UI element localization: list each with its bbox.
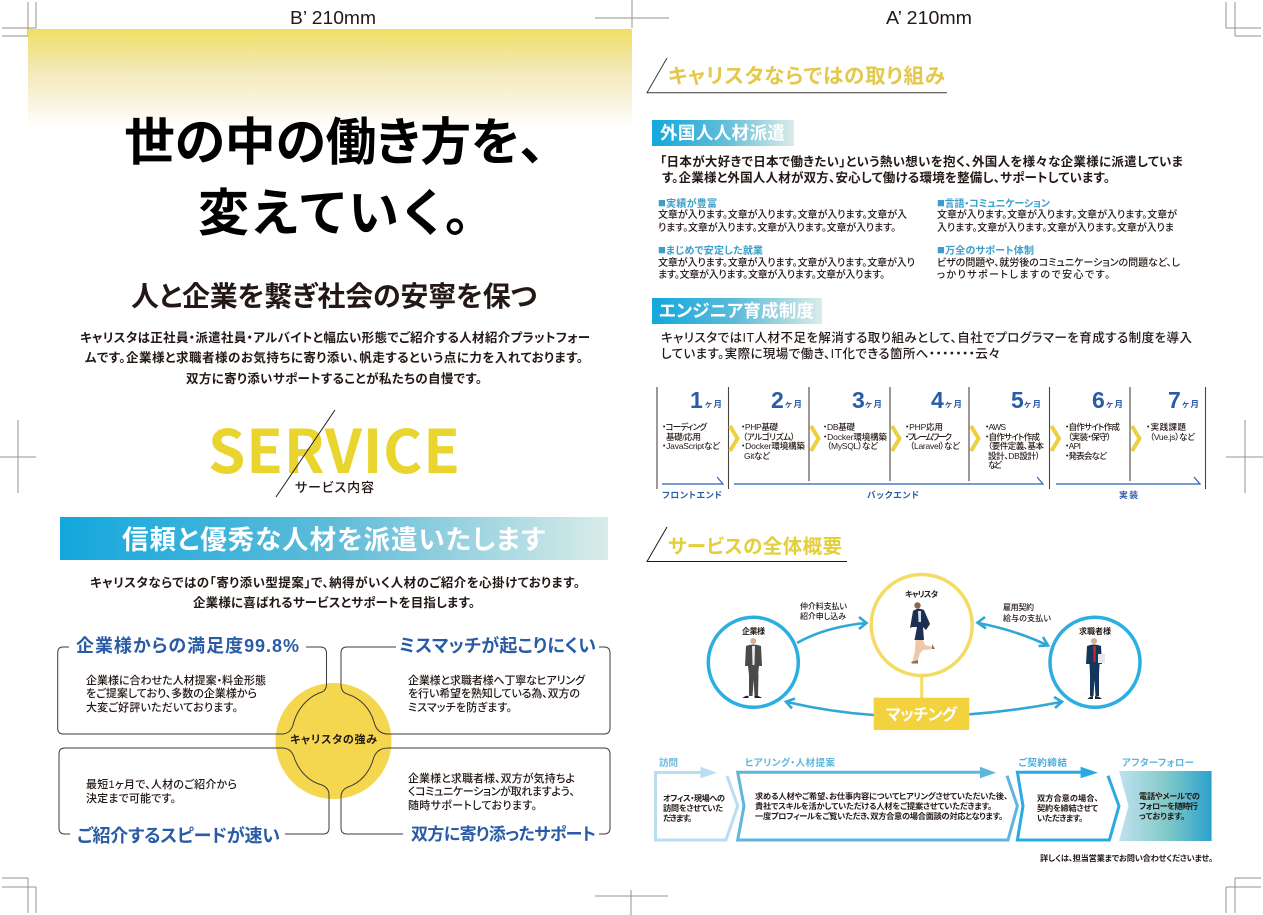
- intro paragraph: ムです。企業様と求職者様のお気持ちに寄り添い、帆走するという点に力を入れております。: [84, 350, 583, 365]
- month numbers: ヶ月: [704, 399, 722, 409]
- section heading: overview: サービスの全体概要: [668, 536, 842, 558]
- top yellow gradient band: [28, 29, 632, 127]
- section heading: overview: [647, 527, 847, 562]
- section heading: initiatives: キャリスタならではの取り組み: [668, 65, 945, 88]
- month 4 content: （Laravel）など: [910, 441, 961, 451]
- strength: satisfaction: 大変ご好評いただいております。: [86, 700, 238, 714]
- month 7 content: [1146, 422, 1196, 442]
- month 6 content: ・自作サイト作成: [1065, 422, 1120, 432]
- month 5 content: 設計、DB設計）: [988, 451, 1040, 461]
- foreign staff paragraph: 「日本が大好きで日本で働きたい」という熱い想いを抱く、外国人を様々な企業様に派遣していま: [660, 154, 1183, 169]
- month 2 content: （アルゴリズム）: [743, 432, 795, 442]
- figure: company man: [742, 638, 762, 698]
- step: aftercare: っております。: [1139, 812, 1185, 821]
- month numbers: 7: [1168, 387, 1181, 413]
- month 4 content: ・PHP応用: [905, 422, 943, 432]
- banner: trust: 信頼と優秀な人材を派遣いたします: [122, 525, 545, 555]
- strength: speed: 最短1ヶ月で、人材のご紹介から: [86, 777, 237, 791]
- strength: support: [341, 748, 610, 844]
- label: engineer training: エンジニア育成制度: [659, 301, 814, 321]
- month 6 content: ・API: [1065, 441, 1081, 451]
- month numbers: ヶ月: [1023, 399, 1041, 409]
- step: visit: 訪問をさせていた: [663, 803, 723, 813]
- month 6 content: ・発表会など: [1065, 451, 1108, 461]
- engineer paragraph: キャリスタではIT人材不足を解消する取り組みとして、自社でプログラマーを育成する制度を導入: [661, 330, 1192, 345]
- matching box: [874, 698, 969, 730]
- engineer paragraph: しています。実際に現場で働き、IT化できる箇所へ・・・・・・・云々: [661, 346, 1000, 361]
- month numbers: 4: [931, 387, 944, 413]
- node labels: キャリスタ: [905, 589, 938, 599]
- step: visit: 訪問: [659, 757, 678, 769]
- size label left: B’ 210mm: [290, 8, 376, 28]
- intro paragraph: キャリスタは正社員・派遣社員・アルバイトと幅広い形態でご紹介する人材紹介プラットフォー: [80, 330, 590, 345]
- arrow labels: [800, 601, 1051, 623]
- feature: support: っかりサポートしますので安心です。: [937, 268, 1110, 281]
- banner paragraph: [90, 575, 580, 610]
- strength: mismatch: ミスマッチが起こりにくい: [399, 635, 596, 656]
- step: contract: 双方合意の場合、: [1037, 793, 1098, 803]
- month 3 content: [823, 422, 887, 451]
- engineer paragraph: [661, 330, 1192, 361]
- step: hearing: [738, 757, 1017, 840]
- month numbers: ヶ月: [784, 399, 802, 409]
- center label: キャリスタの強み: [290, 732, 377, 746]
- strengths diagram: [58, 635, 610, 846]
- month numbers: 1: [690, 387, 703, 413]
- month 3 content: （MySQL）など: [827, 441, 879, 451]
- step: aftercare: [1119, 757, 1212, 841]
- strength: support: 随時サポートしております。: [408, 798, 537, 812]
- arrow labels: 仲介料支払い: [800, 601, 847, 611]
- step: visit: だきます。: [663, 813, 692, 823]
- process flow: [656, 757, 1212, 841]
- phase labels: 実装: [1119, 489, 1138, 500]
- month 5 content: など: [988, 460, 1003, 470]
- strength: mismatch: を行い希望を熟知している為、双方の: [408, 686, 580, 700]
- node labels: 企業様: [742, 626, 765, 636]
- month 7 content: ・実践課題: [1146, 422, 1186, 432]
- chevrons: [730, 426, 1140, 451]
- strength: speed: 決定まで可能です。: [86, 791, 176, 805]
- strength: mismatch: 企業様と求職者様へ丁寧なヒアリング: [408, 673, 586, 687]
- feature: results: [658, 195, 907, 234]
- feature: language: ■言語・コミュニケーション: [937, 195, 1050, 210]
- month numbers: ヶ月: [864, 399, 882, 409]
- banner paragraph: 企業様に喜ばれるサービスとサポートを目指します。: [193, 595, 475, 610]
- strength: support: 双方に寄り添ったサポート: [411, 824, 596, 844]
- feature: language: 文章が入ります。文章が入ります。文章が入ります。文章が: [937, 208, 1177, 221]
- month dividers: [657, 387, 1206, 489]
- step: aftercare: フォローを随時行: [1139, 801, 1198, 811]
- node labels: 求職者様: [1079, 626, 1111, 636]
- step: contract: [1017, 757, 1119, 840]
- step: hearing: 求める人材やご希望、お仕事内容についてヒアリングさせていただいた後、: [755, 791, 1008, 801]
- size label right: A’ 210mm: [886, 8, 972, 28]
- feature: results: 文章が入ります。文章が入ります。文章が入ります。文章が入: [658, 208, 907, 221]
- month 3 content: ・DB基礎: [823, 422, 855, 432]
- section heading: initiatives: [647, 58, 947, 93]
- month 1 content: [662, 422, 721, 451]
- strength: support: 企業様と求職者様、双方が気持ちよ: [408, 771, 575, 785]
- strength: speed: [59, 748, 329, 846]
- step: hearing: 貴社でスキルを活かしていただける人材をご提案させていただきます。: [755, 801, 992, 811]
- arrow labels: 雇用契約: [1003, 602, 1034, 612]
- month 3 content: ・Docker環境構築: [823, 432, 887, 442]
- month 2 content: ・PHP基礎: [741, 422, 778, 432]
- month 6 content: （実装・保守）: [1068, 432, 1111, 442]
- circle: jobseeker: [1050, 617, 1140, 707]
- step: contract: ご契約締結: [1018, 757, 1067, 769]
- strength: satisfaction: 企業様からの満足度99.8%: [76, 636, 299, 656]
- month 2 content: Gitなど: [744, 451, 771, 461]
- step: aftercare: 電話やメールでの: [1139, 791, 1200, 801]
- strength: satisfaction: 企業様に合わせた人材提案・料金形態: [86, 673, 266, 687]
- month 2 content: ・Docker環境構築: [741, 441, 805, 451]
- month 1 content: ・JavaScriptなど: [662, 441, 721, 451]
- strength: mismatch: ミスマッチを防ぎます。: [408, 700, 512, 714]
- strength: satisfaction: [58, 636, 326, 734]
- month 6 content: [1065, 422, 1120, 461]
- figure: jobseeker man: [1086, 638, 1105, 699]
- intro paragraph: [80, 330, 590, 386]
- feature: support: ■万全のサポート体制: [937, 242, 1034, 257]
- relationship diagram: [708, 574, 1140, 730]
- month 5 content: ・AWS: [985, 422, 1006, 432]
- month 5 content: （要件定義、基本: [988, 441, 1044, 451]
- step: visit: [656, 757, 738, 840]
- main title: 世の中の働き方を、: [124, 114, 545, 171]
- step: aftercare: アフターフォロー: [1122, 757, 1194, 769]
- month 1 content: ・コーディング: [662, 422, 708, 432]
- step: contract: いただきます。: [1037, 813, 1083, 823]
- feature: serious: ます。文章が入ります。文章が入ります。文章が入ります。: [658, 268, 885, 281]
- feature: results: ■実績が豊富: [658, 195, 717, 210]
- phase arrows: [662, 477, 1200, 484]
- month numbers: ヶ月: [944, 399, 962, 409]
- feature: language: [937, 195, 1177, 234]
- month 4 content: ・フレームワーク: [905, 432, 952, 442]
- month numbers: 3: [852, 387, 865, 413]
- matching box: マッチング: [886, 705, 958, 724]
- foreign staff paragraph: [660, 154, 1183, 185]
- connector line: [920, 677, 923, 698]
- month 2 content: [741, 422, 805, 461]
- banner paragraph: キャリスタならではの「寄り添い型提案」で、納得がいく人材のご紹介を心掛けております。: [90, 575, 580, 590]
- subtitle: 人と企業を繋ぎ社会の安寧を保つ: [131, 281, 537, 312]
- arrow labels: 給与の支払い: [1003, 613, 1051, 623]
- month 5 content: ・自作サイト作成: [985, 432, 1040, 442]
- flow arrows: [786, 617, 1062, 715]
- feature: serious: [658, 242, 915, 281]
- circle: company: [708, 617, 798, 707]
- strength: satisfaction: をご提案しており、多数の企業様から: [86, 686, 257, 700]
- node labels: [742, 589, 1111, 636]
- service heading: SERVICE: [208, 404, 460, 491]
- step: hearing: ヒアリング・人材提案: [745, 757, 835, 769]
- training timeline: [657, 387, 1206, 500]
- footer note: 詳しくは、担当営業までお問い合わせくださいませ。: [1040, 853, 1213, 863]
- strength: mismatch: [341, 635, 610, 734]
- step: hearing: 一度プロフィールをご覧いただき、双方合意の場合面談の対応となります。: [755, 811, 1003, 821]
- main title: 変えていく。: [198, 185, 470, 242]
- phase labels: [662, 489, 1138, 500]
- feature: results: ります。文章が入ります。文章が入ります。文章が入ります。: [658, 221, 896, 234]
- feature: support: ビザの問題や、就労後のコミュニケーションの問題など、し: [937, 256, 1181, 269]
- month 1 content: 基礎/応用: [666, 432, 701, 442]
- feature: language: 入ります。文章が入ります。文章が入ります。文章が入りま: [937, 221, 1174, 234]
- month numbers: [690, 387, 1199, 413]
- step: contract: 契約を締結させて: [1037, 803, 1098, 813]
- month numbers: ヶ月: [1105, 399, 1123, 409]
- month numbers: 2: [771, 387, 784, 413]
- feature: support: [937, 242, 1181, 281]
- circle: caresta: [871, 574, 972, 676]
- feature: serious: ■まじめで安定した就業: [658, 242, 763, 257]
- month 4 content: [905, 422, 961, 451]
- label: foreign staff: [652, 120, 794, 146]
- strength: speed: ご紹介するスピードが速い: [77, 825, 280, 846]
- main title: [124, 114, 545, 242]
- service heading: サービス内容: [295, 480, 374, 495]
- month numbers: ヶ月: [1181, 399, 1199, 409]
- figure: businesswoman: [910, 602, 935, 664]
- center circle: [276, 683, 392, 799]
- month numbers: 5: [1011, 387, 1024, 413]
- feature: serious: 文章が入ります。文章が入ります。文章が入ります。文章が入り: [658, 256, 915, 269]
- month 7 content: （Vue.js）など: [1150, 432, 1196, 442]
- month numbers: 6: [1092, 387, 1105, 413]
- step: visit: オフィス・現場への: [663, 793, 725, 803]
- month 5 content: [985, 422, 1044, 470]
- phase labels: フロントエンド: [662, 490, 722, 500]
- banner: trust: [60, 517, 608, 560]
- arrow labels: 紹介申し込み: [800, 611, 846, 621]
- phase labels: バックエンド: [867, 490, 919, 500]
- foreign staff paragraph: す。企業様と外国人人材が双方、安心して働ける環境を整備し、サポートしています。: [662, 170, 1110, 185]
- strength: support: くコミュニケーションが取れますよう、: [407, 784, 575, 798]
- intro paragraph: 双方に寄り添いサポートすることが私たちの自慢です。: [186, 371, 482, 386]
- label: foreign staff: 外国人人材派遣: [660, 123, 786, 143]
